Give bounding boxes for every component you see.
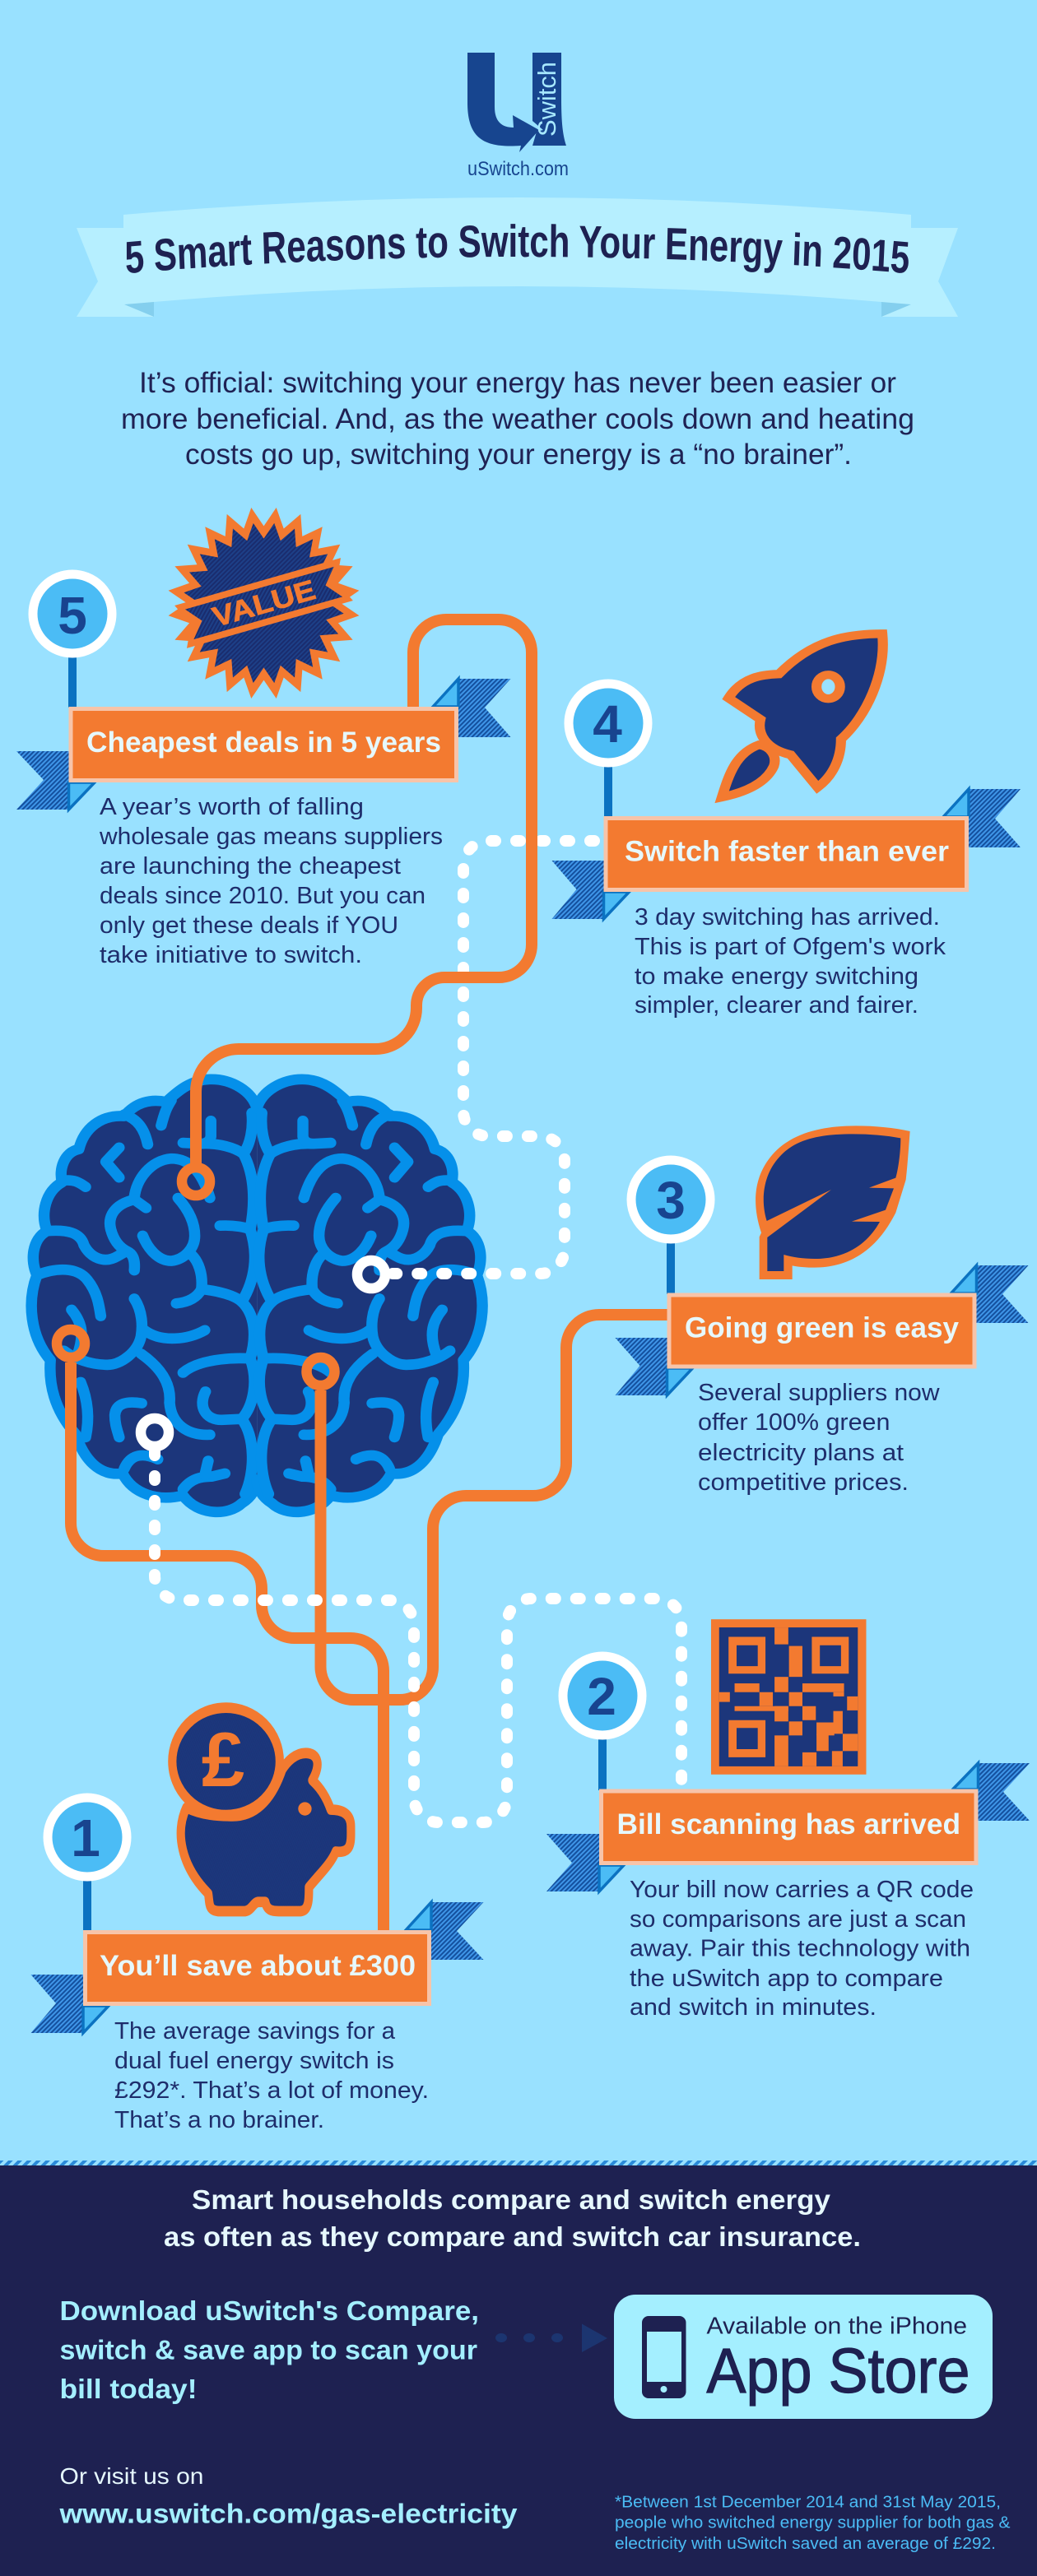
website link (58, 2463, 518, 2529)
pin 2: 2 (587, 1667, 616, 1726)
icon: piggy bank: £ (202, 1716, 244, 1803)
pin 3 (631, 1160, 710, 1294)
title banner: 5 Smart Reasons to Switch Your Energy in 2015 (127, 224, 909, 273)
icon: piggy bank (172, 1708, 351, 1911)
intro text: more beneficial. And, as the weather cools down and heating (121, 403, 914, 435)
footer headline (164, 2184, 861, 2252)
icon: leaf (756, 1126, 910, 1279)
body text: away. Pair this technology with (630, 1935, 970, 1961)
heading box: You’ll save about £300 (100, 1950, 416, 1982)
icon: phone (642, 2316, 686, 2398)
connector: orange line to reason 3 (321, 1315, 667, 1700)
arrow to app store (495, 2323, 607, 2352)
heading box (71, 709, 456, 780)
body text: only get these deals if YOU (100, 912, 398, 939)
footnote (615, 2493, 1011, 2553)
logo: uSwitch: uSwitch.com (467, 158, 569, 180)
intro text: costs go up, switching your energy is a “no brainer”. (185, 439, 852, 471)
ribbon tails (551, 789, 1021, 919)
footer headline: as often as they compare and switch car insurance. (164, 2221, 861, 2252)
logo: uSwitch (467, 53, 569, 180)
icon: value badge (169, 508, 359, 699)
connector: orange line to reason 1 (71, 1362, 384, 1930)
panel: reason 5 (16, 508, 510, 968)
body text: 3 day switching has arrived. (635, 904, 940, 931)
heading box (606, 818, 966, 890)
website link: Or visit us on (59, 2463, 204, 2489)
body text: take initiative to switch. (100, 942, 362, 968)
panel: reason 3 (616, 1126, 1029, 1496)
connector: dotted line to reason 4 (390, 841, 594, 1274)
body text (698, 1380, 941, 1496)
ribbon tails (31, 1902, 484, 2033)
brain (31, 1079, 482, 1512)
body text: electricity plans at (698, 1440, 904, 1466)
body text: wholesale gas means suppliers (99, 824, 443, 850)
body text: That’s a no brainer. (114, 2107, 324, 2133)
panel: reason 2 (546, 1619, 1030, 2021)
app download call to action: bill today! (59, 2374, 198, 2404)
body text (114, 2018, 429, 2133)
connector: dotted line to reason 2 (155, 1451, 681, 1822)
heading box: Going green is easy (685, 1312, 960, 1344)
pin 5: 5 (58, 586, 87, 645)
heading box (601, 1791, 976, 1863)
intro text (121, 367, 914, 471)
icon: value badge: VALUE (209, 574, 319, 634)
intro text: It’s official: switching your energy has never been easier or (139, 367, 896, 399)
app store button (614, 2295, 993, 2419)
body text: simpler, clearer and fairer. (635, 992, 918, 1019)
heading box (669, 1295, 974, 1367)
connector: orange line to reason 5 (196, 620, 532, 1167)
app download call to action (59, 2295, 479, 2404)
panel: reason 1 (31, 1708, 484, 2133)
app store button: App Store (706, 2336, 970, 2407)
pin 4 (569, 684, 648, 817)
footer headline: Smart households compare and switch energy (192, 2184, 831, 2215)
pin 3: 3 (656, 1171, 686, 1230)
body text: to make energy switching (635, 963, 918, 990)
ribbon tails (546, 1763, 1030, 1891)
body text: are launching the cheapest (100, 853, 401, 880)
body text (99, 794, 443, 968)
body text: This is part of Ofgem's work (635, 934, 946, 960)
body text (635, 904, 946, 1019)
heading box: Cheapest deals in 5 years (86, 726, 441, 759)
body text: A year’s worth of falling (100, 794, 364, 820)
footnote: *Between 1st December 2014 and 31st May 2015, (615, 2493, 1001, 2511)
body text: so comparisons are just a scan (630, 1906, 966, 1933)
heading box: Switch faster than ever (625, 836, 949, 867)
body text: offer 100% green (698, 1409, 891, 1436)
brain nodes: white rings (141, 1260, 385, 1446)
app download call to action: switch & save app to scan your (59, 2335, 477, 2365)
panel: reason 4 (551, 634, 1021, 1019)
website link: www.uswitch.com/gas-electricity (58, 2498, 518, 2529)
title banner (77, 197, 958, 317)
body text: The average savings for a (114, 2018, 396, 2045)
body text: £292*. That’s a lot of money. (114, 2077, 429, 2104)
heading box (86, 1932, 430, 2004)
pin 1 (48, 1798, 127, 1931)
app download call to action: Download uSwitch's Compare, (59, 2295, 479, 2326)
pin 1: 1 (71, 1808, 100, 1868)
footer panel (0, 2161, 1037, 2576)
footnote: people who switched energy supplier for both gas & (615, 2514, 1011, 2532)
footnote: electricity with uSwitch saved an average of £292. (615, 2535, 996, 2553)
body text (630, 1877, 974, 2021)
body text: deals since 2010. But you can (100, 883, 425, 909)
body text: Your bill now carries a QR code (630, 1877, 974, 1903)
body text: Several suppliers now (698, 1380, 941, 1406)
body text: and switch in minutes. (630, 1994, 877, 2021)
body text: competitive prices. (698, 1469, 909, 1496)
pin 5 (33, 574, 112, 708)
heading box: Bill scanning has arrived (617, 1808, 960, 1840)
icon: QR code (711, 1619, 866, 1775)
ribbon tails (616, 1265, 1029, 1395)
pin 2 (563, 1656, 642, 1790)
logo: uSwitch: Switch (532, 62, 561, 137)
app store button: Available on the iPhone (706, 2314, 967, 2340)
ribbon tails (16, 679, 510, 810)
body text: the uSwitch app to compare (630, 1966, 943, 1992)
brain nodes: orange rings (57, 1167, 334, 1385)
body text: dual fuel energy switch is (114, 2048, 394, 2074)
pin 4: 4 (593, 694, 622, 754)
icon: rocket (722, 634, 883, 797)
